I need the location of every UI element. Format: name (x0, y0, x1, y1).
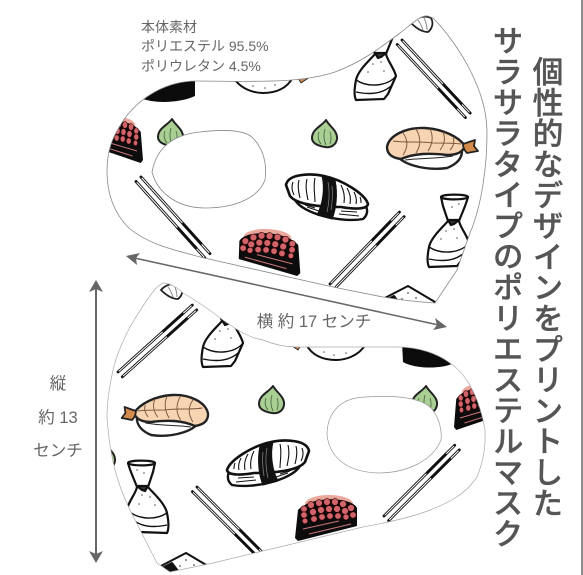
sushi pattern: lower mask (110, 284, 483, 572)
label: height: 縦 (50, 374, 67, 393)
arrow: width measurement (126, 253, 447, 330)
outline: upper mask (107, 16, 487, 303)
label: height: センチ (33, 442, 83, 460)
mask: upper sushi-pattern mask (96, 16, 487, 310)
label: width: 横 約 17 センチ (257, 312, 371, 331)
label: height: 約 13 (38, 408, 78, 427)
arrow: height measurement (89, 280, 103, 563)
sushi pattern: upper mask (96, 17, 478, 310)
material text: ポリエステル 95.5% (141, 38, 269, 54)
material text: ポリウレタン 4.5% (141, 58, 261, 74)
eye opening: lower mask (327, 396, 441, 473)
title: left column: サラサラタイプのポリエステルマスク (488, 25, 522, 549)
eye opening: upper mask (152, 130, 266, 208)
label: height (33, 374, 83, 460)
outline: lower mask (107, 283, 485, 572)
material text (141, 19, 269, 74)
material text: 本体素材 (141, 19, 197, 35)
right edge line (581, 0, 583, 575)
title: right column: 個性的なデザインをプリントした (528, 56, 563, 518)
mask: lower sushi-pattern mask (90, 283, 500, 575)
